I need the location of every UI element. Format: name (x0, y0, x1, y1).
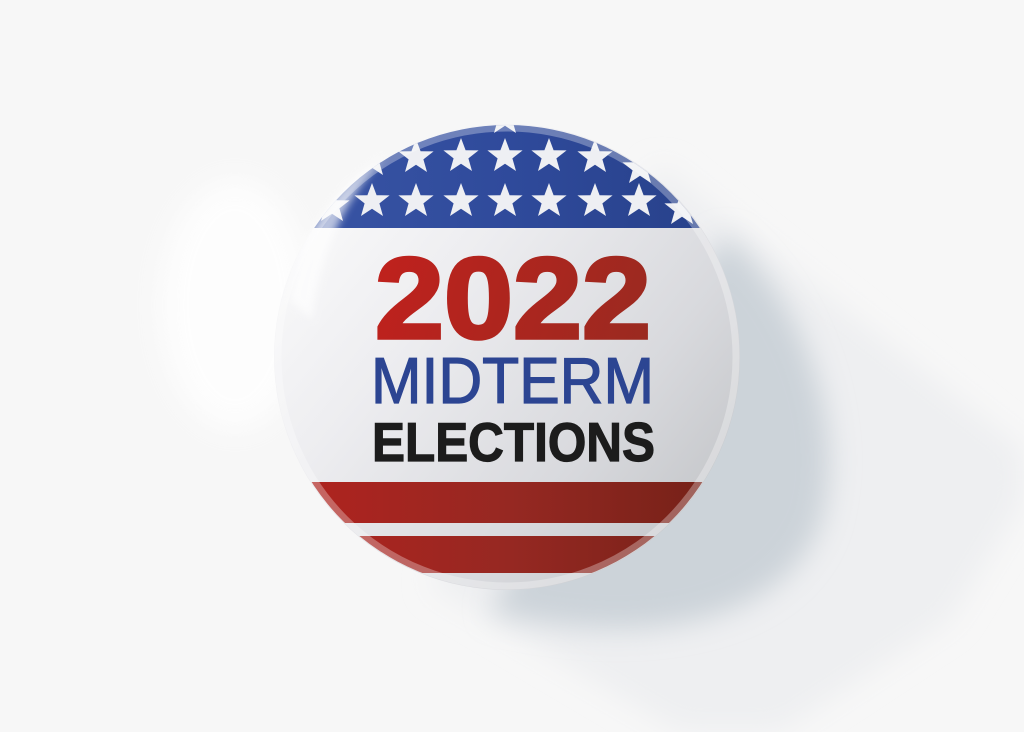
glossy rim (278, 128, 736, 586)
long soft shadow (430, 165, 1024, 732)
cast shadow (490, 235, 829, 629)
gloss on upper left (290, 155, 385, 320)
heading: 2022: 2022 (375, 235, 651, 363)
light highlight on the surface (160, 180, 310, 430)
heading: MIDTERM: MIDTERM (371, 344, 654, 417)
button face (274, 124, 740, 590)
heading: ELECTIONS: ELECTIONS (372, 411, 655, 473)
red stripe lower (360, 536, 654, 573)
campaign button infographic (296, 125, 1006, 713)
flag band: blue field with stars (314, 125, 700, 228)
red stripe upper (312, 482, 702, 523)
button (270, 100, 750, 590)
